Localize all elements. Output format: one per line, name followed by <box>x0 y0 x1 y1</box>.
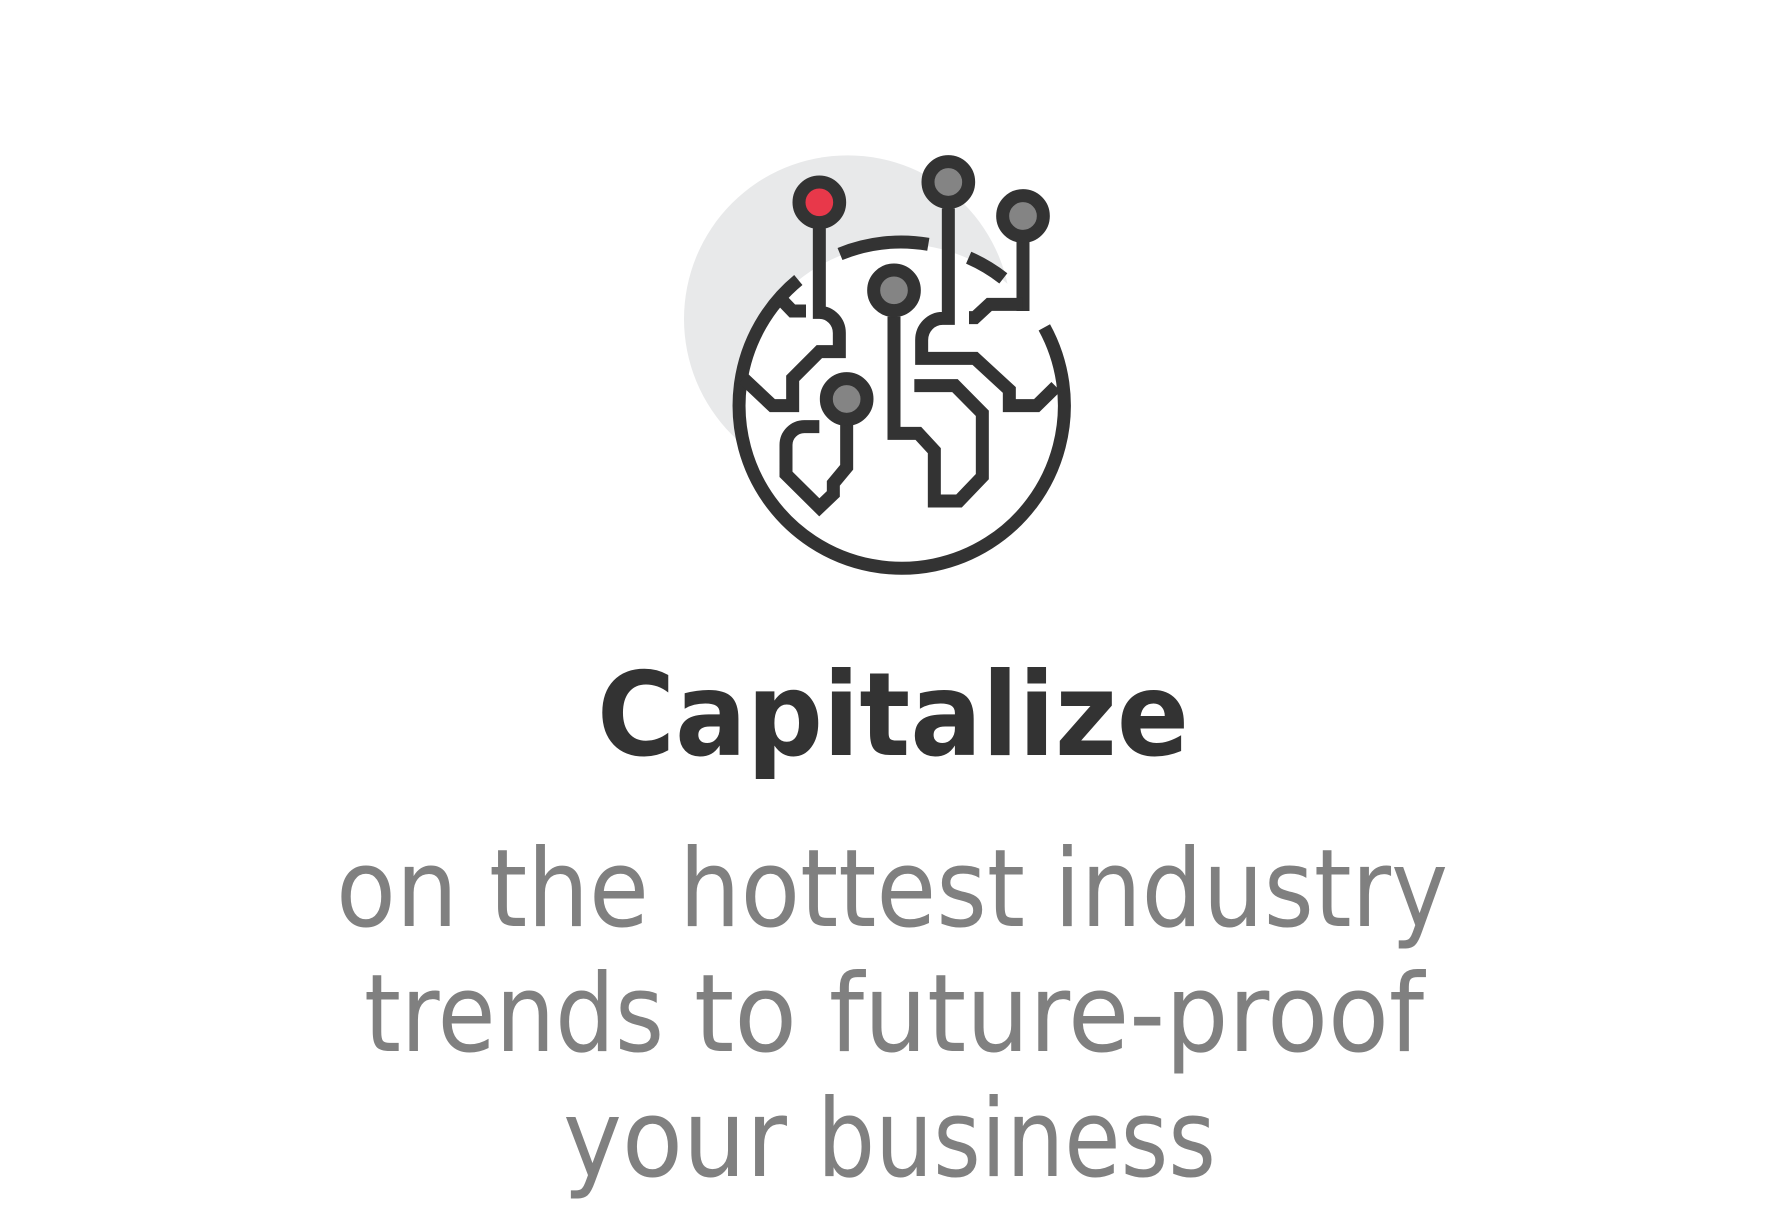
circuit trace: top pin continent <box>922 208 1056 406</box>
body line 2 <box>364 952 1427 1077</box>
body line 1: the <box>489 827 649 952</box>
body line 3: business <box>817 1077 1216 1202</box>
circuit trace: centre pin continent <box>894 317 982 501</box>
pin: grey centre <box>874 270 914 311</box>
pin: grey right <box>1003 196 1043 236</box>
body line 2: to <box>694 952 797 1077</box>
icon: globe circuit <box>684 155 1064 569</box>
pin: red <box>799 182 840 223</box>
circuit trace: right pin <box>969 242 1023 318</box>
body line 1 <box>336 827 1448 952</box>
body line 1: hottest <box>679 827 1025 952</box>
body line 1: on <box>336 827 458 952</box>
globe outline arcs <box>739 242 1064 568</box>
icon backdrop: grey circle <box>684 155 1011 483</box>
pin: grey lower <box>826 379 867 419</box>
body line 3 <box>563 1077 1216 1202</box>
body line 2: trends <box>364 952 664 1077</box>
body line 1: industry <box>1054 827 1448 952</box>
circuit trace: lower pin continent <box>786 425 847 507</box>
heading: Capitalize <box>597 648 1189 783</box>
body text <box>336 827 1448 1202</box>
circuit trace: red pin continent <box>743 228 839 406</box>
body line 2: future-proof <box>829 952 1427 1077</box>
globe white interior <box>738 244 1063 569</box>
pin: grey top <box>928 162 969 202</box>
body line 3: your <box>563 1077 788 1202</box>
